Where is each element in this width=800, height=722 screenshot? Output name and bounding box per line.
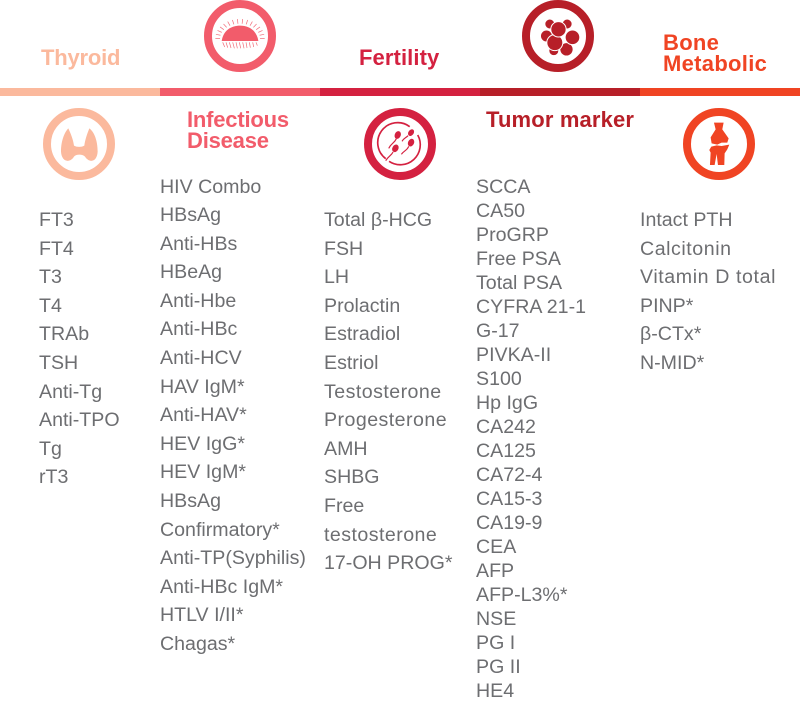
- list: Infectious Disease tests: Anti-HBc: [160, 318, 237, 340]
- list: Tumor marker tests: CA242: [476, 416, 536, 438]
- list: Infectious Disease tests: HEV IgG*: [160, 433, 245, 455]
- list: Thyroid tests: [39, 209, 120, 488]
- heading: Bone Metabolic: [663, 30, 767, 76]
- list: Thyroid tests: TSH: [39, 352, 78, 374]
- list: Infectious Disease tests: Anti-TP(Syphilis): [160, 547, 306, 569]
- list: Infectious Disease tests: Anti-HCV: [160, 347, 242, 369]
- list: Tumor marker tests: CA72-4: [476, 464, 542, 486]
- heading: Bone Metabolic: Metabolic: [663, 51, 767, 76]
- list: Bone Metabolic tests: Calcitonin: [640, 238, 732, 260]
- list: Tumor marker tests: CA19-9: [476, 512, 542, 534]
- heading: Bone Metabolic: Bone: [663, 30, 719, 55]
- list: Tumor marker tests: Free PSA: [476, 248, 561, 270]
- list: Infectious Disease tests: HBsAg: [160, 490, 221, 512]
- list: Fertility tests: [324, 209, 452, 574]
- heading: Infectious Disease: Infectious: [187, 107, 289, 132]
- heading: Infectious Disease: [187, 107, 289, 153]
- list: Fertility tests: testosterone: [324, 524, 437, 546]
- list: Fertility tests: Estradiol: [324, 323, 400, 345]
- list: Tumor marker tests: PG I: [476, 632, 515, 654]
- icon: knee joint: [683, 108, 755, 180]
- list: Bone Metabolic tests: [640, 209, 776, 374]
- icon: thyroid: [43, 108, 115, 180]
- list: Infectious Disease tests: HAV IgM*: [160, 376, 245, 398]
- list: Fertility tests: Total β-HCG: [324, 209, 432, 231]
- list: Infectious Disease tests: Anti-HAV*: [160, 404, 247, 426]
- list: Tumor marker tests: G-17: [476, 320, 520, 342]
- heading: Fertility: Fertility: [359, 45, 439, 70]
- list: Tumor marker tests: CYFRA 21-1: [476, 296, 586, 318]
- list: Tumor marker tests: S100: [476, 368, 522, 390]
- list: Fertility tests: Progesterone: [324, 409, 447, 431]
- list: Infectious Disease tests: HBsAg: [160, 204, 221, 226]
- list: Fertility tests: AMH: [324, 438, 368, 460]
- list: Tumor marker tests: CA125: [476, 440, 536, 462]
- list: Bone Metabolic tests: Intact PTH: [640, 209, 733, 231]
- list: Tumor marker tests: PIVKA-II: [476, 344, 551, 366]
- list: Fertility tests: Free: [324, 495, 364, 517]
- list: Infectious Disease tests: Anti-HBc IgM*: [160, 576, 283, 598]
- list: Tumor marker tests: CA15-3: [476, 488, 542, 510]
- list: Tumor marker tests: ProGRP: [476, 224, 549, 246]
- list: Tumor marker tests: Hp IgG: [476, 392, 538, 414]
- list: Fertility tests: Prolactin: [324, 295, 400, 317]
- list: Tumor marker tests: [476, 176, 586, 702]
- list: Thyroid tests: TRAb: [39, 323, 89, 345]
- list: Infectious Disease tests: HIV Combo: [160, 176, 261, 198]
- list: Tumor marker tests: NSE: [476, 608, 516, 630]
- list: Tumor marker tests: PG II: [476, 656, 521, 678]
- list: Thyroid tests: rT3: [39, 466, 68, 488]
- list: Infectious Disease tests: Chagas*: [160, 633, 235, 655]
- list: Bone Metabolic tests: N-MID*: [640, 352, 704, 374]
- list: Tumor marker tests: Total PSA: [476, 272, 562, 294]
- list: Fertility tests: FSH: [324, 238, 363, 260]
- icon: virus: [204, 0, 276, 72]
- heading: Infectious Disease: Disease: [187, 128, 269, 153]
- list: Infectious Disease tests: HBeAg: [160, 261, 222, 283]
- list: Tumor marker tests: CA50: [476, 200, 525, 222]
- list: Bone Metabolic tests: β-CTx*: [640, 323, 701, 345]
- list: Thyroid tests: T3: [39, 266, 62, 288]
- list: Infectious Disease tests: HEV IgM*: [160, 461, 246, 483]
- list: Fertility tests: LH: [324, 266, 349, 288]
- list: Fertility tests: Testosterone: [324, 381, 442, 403]
- list: Tumor marker tests: AFP-L3%*: [476, 584, 567, 606]
- list: Thyroid tests: FT4: [39, 238, 74, 260]
- list: Thyroid tests: T4: [39, 295, 62, 317]
- list: Tumor marker tests: SCCA: [476, 176, 530, 198]
- list: Tumor marker tests: CEA: [476, 536, 516, 558]
- list: Fertility tests: 17-OH PROG*: [324, 552, 452, 574]
- list: Fertility tests: Estriol: [324, 352, 378, 374]
- heading: Tumor marker: Tumor marker: [486, 107, 634, 132]
- list: Infectious Disease tests: Anti-HBs: [160, 233, 237, 255]
- list: Thyroid tests: Anti-Tg: [39, 381, 102, 403]
- list: Tumor marker tests: AFP: [476, 560, 514, 582]
- list: Infectious Disease tests: Anti-Hbe: [160, 290, 236, 312]
- list: Thyroid tests: Tg: [39, 438, 62, 460]
- list: Bone Metabolic tests: PINP*: [640, 295, 693, 317]
- list: Tumor marker tests: HE4: [476, 680, 514, 702]
- icon: sperm: [364, 108, 436, 180]
- list: Infectious Disease tests: HTLV I/II*: [160, 604, 243, 626]
- icon: tumor cell cluster: [522, 0, 594, 72]
- list: Infectious Disease tests: Confirmatory*: [160, 519, 280, 541]
- heading: Thyroid: Thyroid: [41, 45, 120, 70]
- list: Fertility tests: SHBG: [324, 466, 380, 488]
- list: Thyroid tests: Anti-TPO: [39, 409, 120, 431]
- color band: [0, 88, 800, 96]
- list: Bone Metabolic tests: Vitamin D total: [640, 266, 776, 288]
- list: Thyroid tests: FT3: [39, 209, 74, 231]
- list: Infectious Disease tests: [160, 176, 306, 655]
